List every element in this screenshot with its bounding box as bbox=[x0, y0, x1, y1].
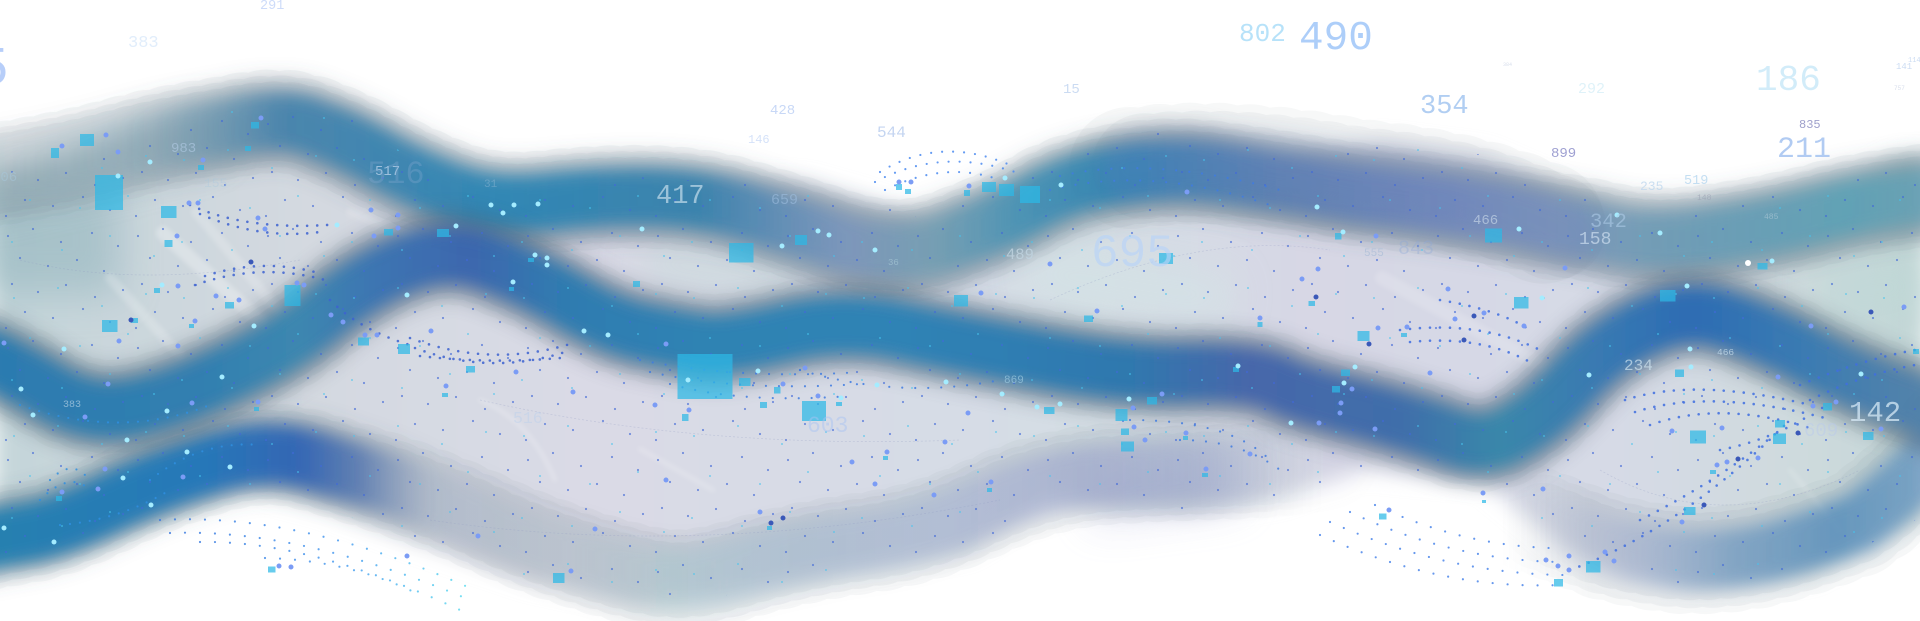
number 342: 342 bbox=[1590, 211, 1627, 234]
ribbon: bottom-right strand bbox=[1530, 420, 1920, 560]
periwinkle node dots bbox=[4, 118, 1904, 571]
number 15: 15 bbox=[1063, 82, 1080, 98]
ribbon: lower strand fading to lavender bbox=[0, 454, 1330, 580]
number 31: 31 bbox=[484, 179, 498, 191]
number 141: 141 bbox=[1896, 62, 1912, 72]
number 383: 383 bbox=[128, 34, 159, 53]
number 544: 544 bbox=[877, 124, 906, 142]
number 485: 485 bbox=[1764, 213, 1779, 222]
number 155: 155 bbox=[204, 176, 227, 191]
number 659: 659 bbox=[771, 192, 798, 209]
light streaks in the mesh bbox=[110, 212, 1840, 530]
number 186: 186 bbox=[1756, 60, 1821, 101]
number 428: 428 bbox=[770, 103, 795, 119]
number 519: 519 bbox=[1684, 174, 1708, 189]
number 899: 899 bbox=[1551, 146, 1576, 162]
number 757: 757 bbox=[1894, 85, 1905, 92]
number 211: 211 bbox=[1777, 133, 1831, 167]
floating numbers bbox=[0, 0, 1920, 442]
number 695: 695 bbox=[1091, 228, 1174, 280]
number 835: 835 bbox=[1799, 118, 1821, 132]
number 158: 158 bbox=[1579, 230, 1611, 250]
number 869: 869 bbox=[1004, 375, 1024, 387]
number 383 small: 383 bbox=[63, 400, 81, 411]
number 466 small: 466 bbox=[1717, 347, 1734, 358]
number 516 large: 516 bbox=[367, 156, 425, 193]
ribbon: central strand bbox=[0, 255, 1920, 443]
number 843: 843 bbox=[1398, 238, 1434, 261]
ribbon: upper strand bbox=[0, 121, 1920, 251]
number 417: 417 bbox=[656, 182, 705, 212]
number 983: 983 bbox=[171, 141, 196, 157]
faint mesh lines bbox=[20, 246, 1860, 536]
bright cyan node dots bbox=[4, 162, 1861, 542]
number 292: 292 bbox=[1578, 81, 1605, 98]
number 490: 490 bbox=[1299, 16, 1373, 62]
number 466: 466 bbox=[1473, 213, 1498, 229]
number 555: 555 bbox=[1364, 248, 1384, 260]
number 235: 235 bbox=[1640, 179, 1663, 194]
number 489: 489 bbox=[1006, 246, 1034, 264]
number 146: 146 bbox=[748, 133, 770, 147]
dot rows following the waves bbox=[20, 152, 1915, 610]
number 354: 354 bbox=[1420, 92, 1469, 122]
number 36: 36 bbox=[888, 258, 899, 268]
scalloped circle chains forming the ribbon halos bbox=[0, 121, 1920, 580]
number 609: 609 bbox=[1804, 420, 1838, 442]
number 516: 516 bbox=[513, 409, 543, 428]
dark navy node dots bbox=[131, 262, 1871, 523]
number 517: 517 bbox=[375, 164, 400, 180]
number 234: 234 bbox=[1624, 357, 1653, 375]
white highlight dot bbox=[1745, 260, 1751, 266]
number 384: 384 bbox=[1503, 62, 1512, 68]
marker squares bbox=[51, 122, 1919, 586]
number 802: 802 bbox=[1239, 19, 1286, 49]
number 142: 142 bbox=[1849, 397, 1901, 430]
number 603: 603 bbox=[807, 413, 848, 439]
number 148: 148 bbox=[1697, 194, 1712, 203]
